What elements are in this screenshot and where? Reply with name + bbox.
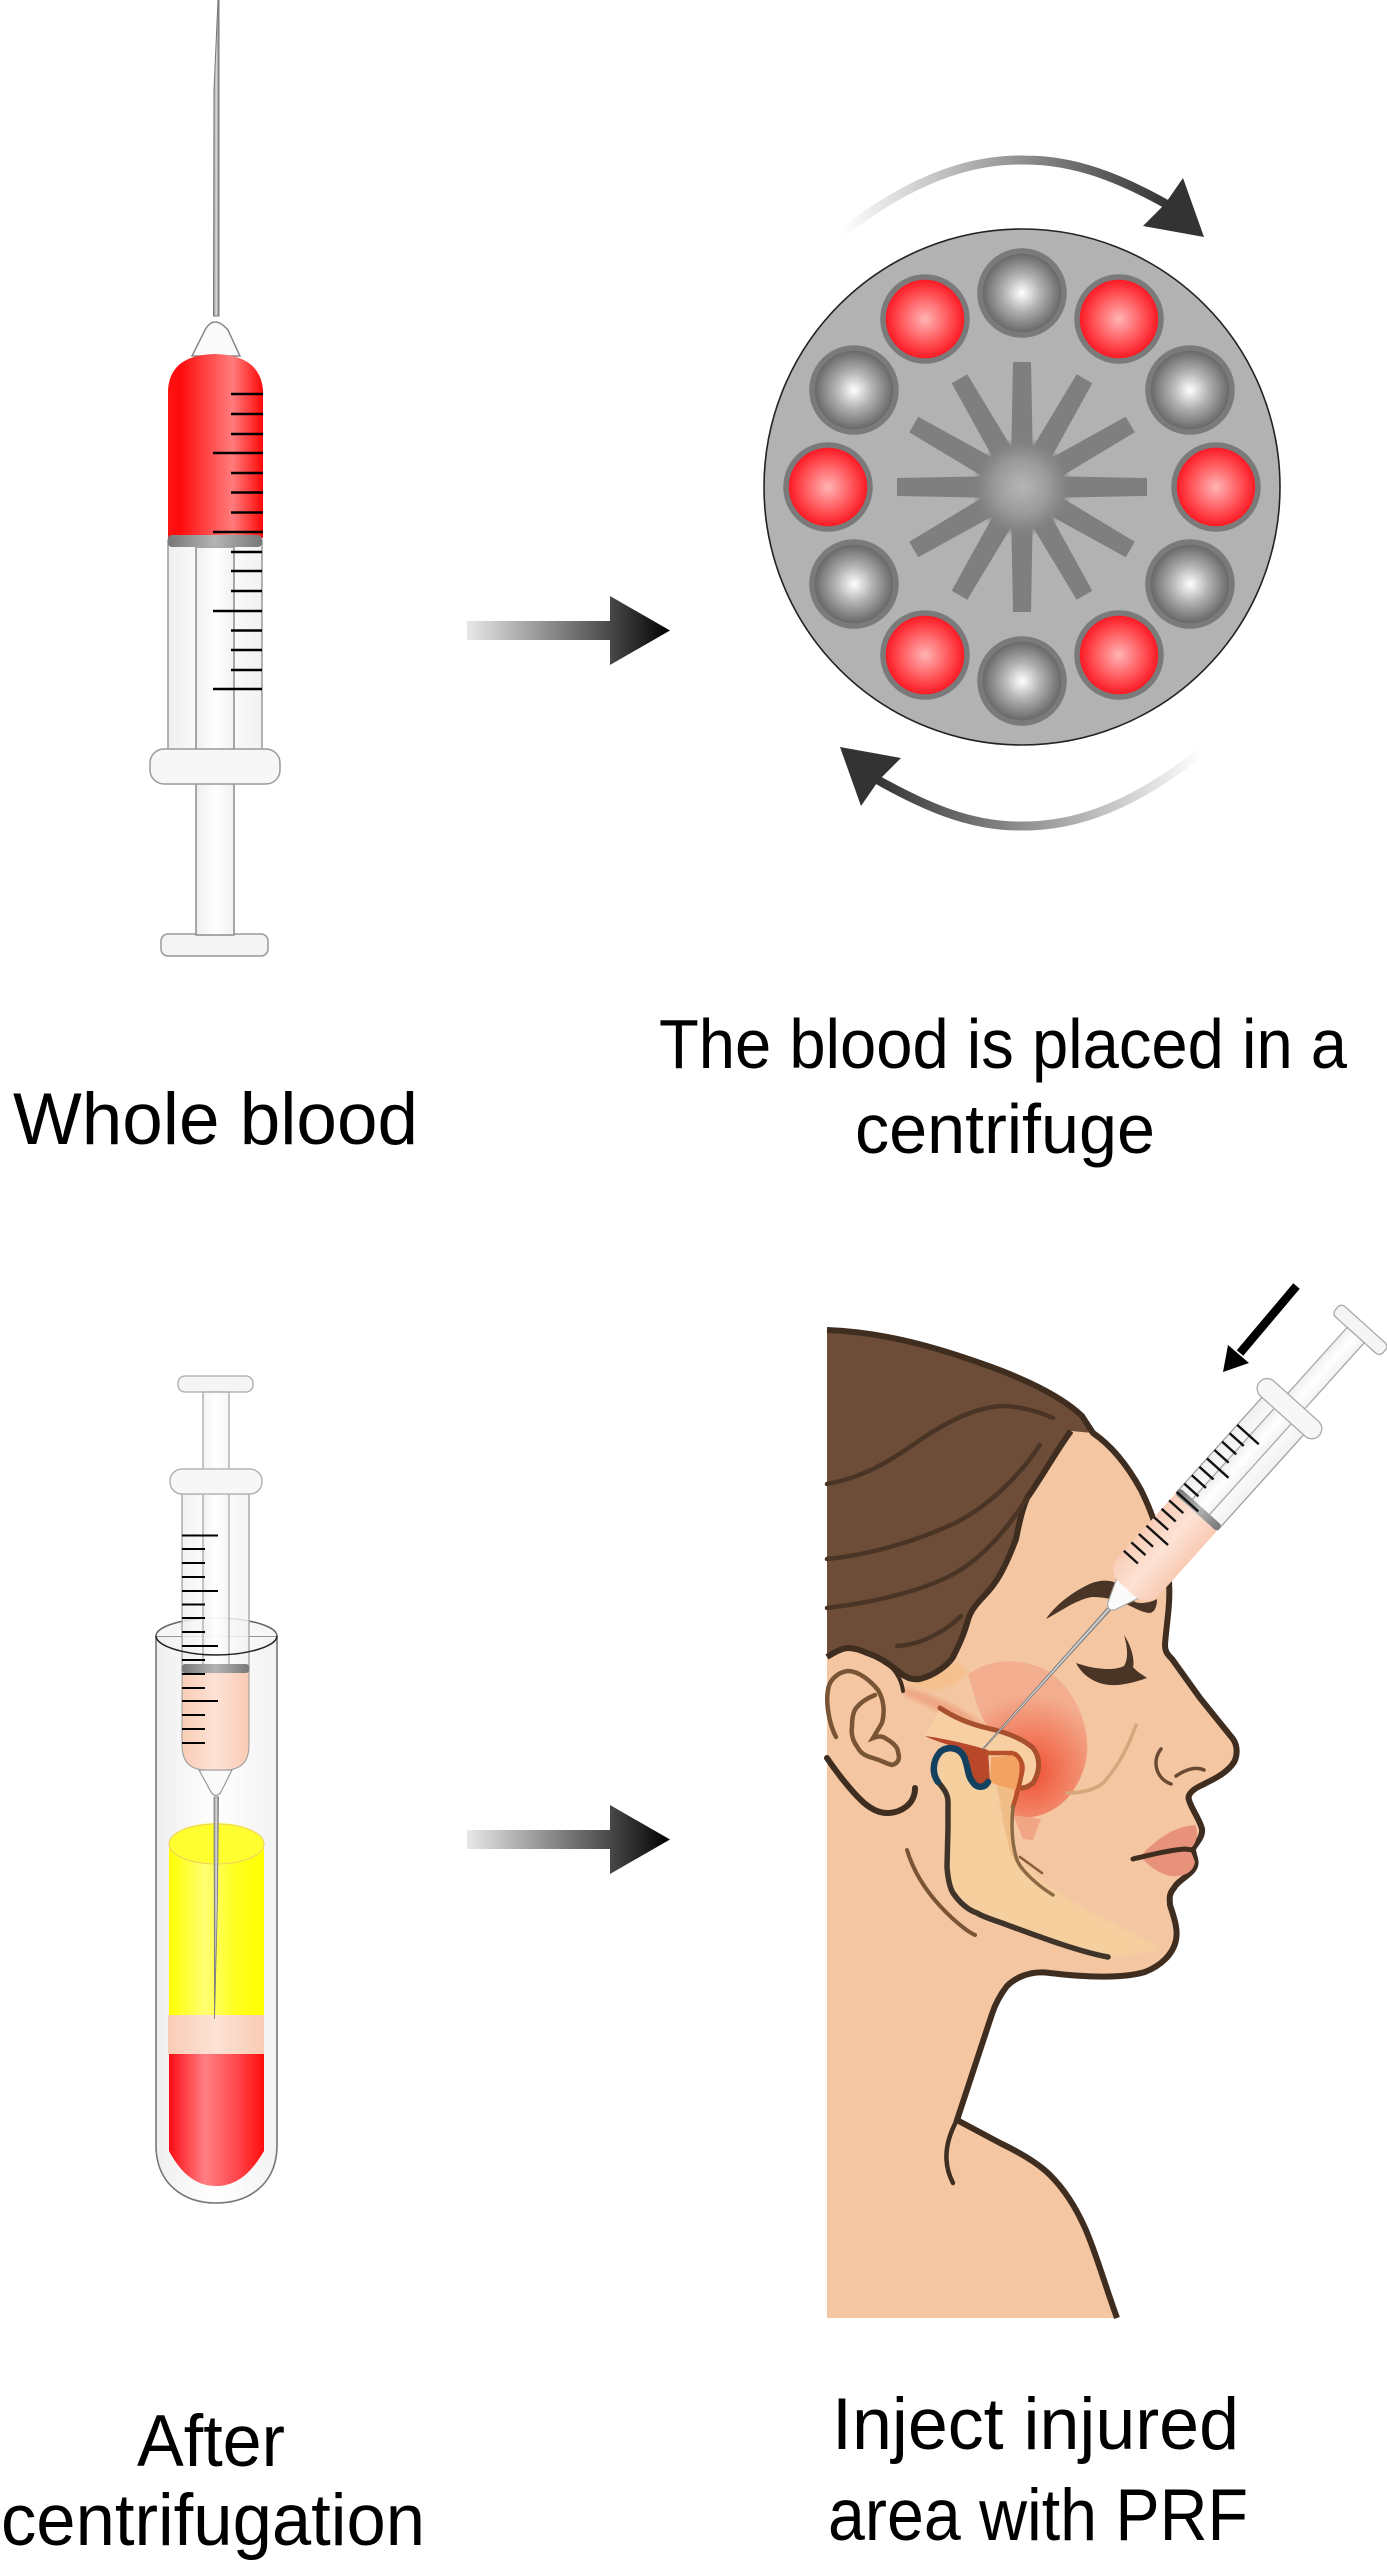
stopper bbox=[168, 535, 262, 547]
sample wells bbox=[786, 251, 1258, 723]
label: after centrifugation: After bbox=[137, 2401, 285, 2482]
barrel bbox=[168, 540, 262, 750]
red cell layer bbox=[169, 2054, 264, 2186]
plunger end bar bbox=[161, 934, 268, 956]
needle bbox=[214, 0, 219, 316]
pink tissue strip bbox=[903, 1687, 990, 1728]
needle hub bbox=[1098, 1578, 1139, 1619]
eyebrow bbox=[1046, 1581, 1157, 1619]
neck line bbox=[907, 1850, 975, 1935]
plunger rod bbox=[1190, 1327, 1364, 1517]
label: centrifuge: centrifuge bbox=[855, 1090, 1155, 1168]
syringe: whole blood bbox=[150, 0, 280, 956]
label: inject: area with PRF bbox=[828, 2475, 1248, 2556]
scale ticks bbox=[213, 394, 263, 689]
label: after centrifugation bbox=[1, 2401, 425, 2560]
plunger bar bbox=[1332, 1303, 1387, 1356]
joint disc bbox=[990, 1755, 1019, 1790]
test tube with separated blood bbox=[156, 1376, 277, 2203]
PRF fill bbox=[1106, 1492, 1218, 1608]
syringe drawing PRF bbox=[170, 1376, 262, 2019]
rotor hub bbox=[972, 437, 1072, 537]
rotor spokes bbox=[897, 362, 1147, 612]
label: inject: Inject injured bbox=[832, 2384, 1239, 2465]
label: after centrifugation: centrifugation bbox=[1, 2480, 425, 2560]
cheek crease bbox=[1067, 1725, 1136, 1793]
arrow: to centrifuge bbox=[467, 596, 670, 665]
label: inject bbox=[828, 2384, 1248, 2556]
finger flange bbox=[150, 749, 280, 784]
sideburn bbox=[890, 1666, 903, 1691]
face outline bbox=[827, 1330, 1237, 2318]
face profile illustration bbox=[827, 1330, 1237, 2318]
condyle outline bbox=[934, 1748, 988, 1787]
label: centrifuge: The blood is placed in a bbox=[659, 1005, 1347, 1083]
yellow plasma layer bbox=[169, 1823, 264, 2015]
tube rim back bbox=[156, 1618, 277, 1636]
lighter joint capsule bbox=[925, 1708, 1039, 1786]
hair strands bbox=[827, 1406, 1053, 1646]
arrow: clockwise bottom bbox=[840, 747, 1202, 826]
hair bbox=[827, 1330, 1093, 1679]
syringe injecting PRF bbox=[953, 1298, 1387, 1776]
arrow: push direction bbox=[1223, 1286, 1296, 1372]
ear bbox=[827, 1671, 899, 1765]
neck crease bbox=[946, 2120, 957, 2183]
hair front edge bbox=[827, 1431, 1071, 1679]
ticks bbox=[1124, 1425, 1259, 1570]
blood fill bbox=[168, 354, 263, 538]
needle hub bbox=[192, 322, 240, 356]
lighter jaw area bbox=[938, 1748, 1160, 1957]
lips bbox=[1141, 1825, 1197, 1876]
glow: injured joint bbox=[968, 1661, 1087, 1818]
buffy coat layer bbox=[168, 2015, 264, 2054]
glenoid fossa bbox=[925, 1736, 990, 1786]
nostril bbox=[1156, 1749, 1204, 1784]
arrow: to injection bbox=[467, 1805, 670, 1874]
stopper bbox=[1175, 1488, 1222, 1531]
upper tissue band bbox=[903, 1660, 968, 1690]
mouth line bbox=[1133, 1849, 1193, 1859]
centrifuge bbox=[764, 229, 1280, 745]
plunger rod bbox=[196, 547, 234, 935]
articular lines bbox=[940, 1708, 1053, 1895]
skin bbox=[827, 1330, 1237, 2318]
tube rim front bbox=[156, 1636, 277, 1655]
label: centrifuge bbox=[659, 1005, 1347, 1168]
mandible outline bbox=[938, 1782, 1108, 1957]
rotor disc bbox=[764, 229, 1280, 745]
barrel bbox=[1176, 1396, 1305, 1530]
arrow: clockwise top bbox=[842, 160, 1204, 237]
tan strip beside ramus bbox=[997, 1783, 1022, 1873]
jaw line bbox=[827, 1758, 915, 1813]
tissue tail below joint bbox=[1013, 1815, 1041, 1840]
finger flange bbox=[1253, 1374, 1326, 1443]
label: whole blood: Whole blood bbox=[13, 1079, 418, 1160]
closed eye bbox=[1076, 1635, 1147, 1685]
tube body bbox=[156, 1636, 277, 2203]
needle bbox=[982, 1606, 1112, 1750]
